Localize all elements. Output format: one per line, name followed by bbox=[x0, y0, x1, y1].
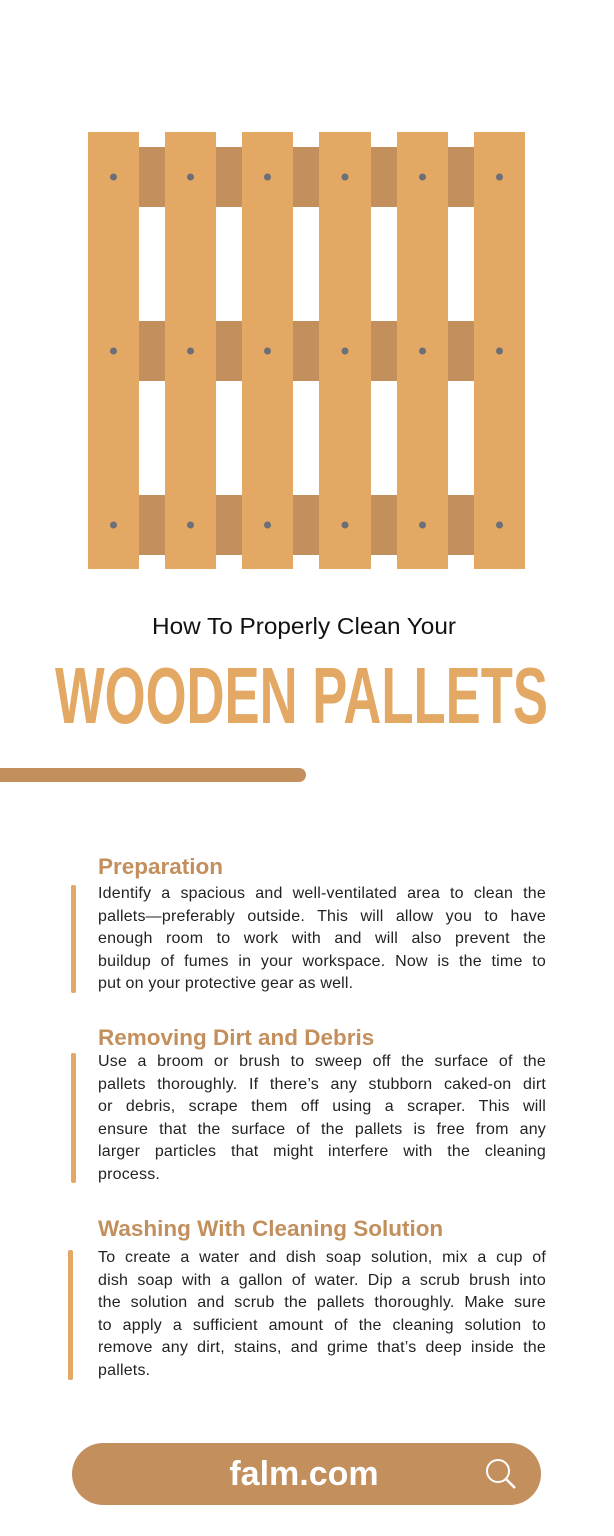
text: preparation: put on your protective gear as well. bbox=[98, 975, 353, 992]
text: removing dirt: ensure that the surface of the pallets is free from any bbox=[98, 1120, 546, 1138]
text: washing bbox=[98, 1249, 546, 1378]
heading: removing dirt: Removing Dirt and Debris bbox=[98, 1025, 374, 1050]
text: washing: remove any dirt, stains, and grime that’s deep inside the bbox=[98, 1339, 546, 1356]
text: removing dirt: Use a broom or brush to sweep off the surface of the bbox=[98, 1053, 546, 1070]
text: washing: To create a water and dish soap solution, mix a cup of bbox=[98, 1249, 546, 1266]
divider bar bbox=[0, 768, 306, 782]
text: washing: dish soap with a gallon of water. Dip a scrub brush into bbox=[98, 1272, 546, 1288]
heading: preparation: Preparation bbox=[98, 854, 223, 879]
text: preparation: pallets—preferably outside. This will allow you to have bbox=[98, 908, 546, 924]
text: preparation: Identify a spacious and well-ventilated area to clean the bbox=[98, 885, 546, 902]
section: preparation bbox=[71, 854, 546, 993]
section: washing bbox=[68, 1216, 546, 1380]
pallet illustration bbox=[88, 132, 525, 569]
footer pill bbox=[72, 1443, 541, 1505]
accent bar bbox=[68, 1250, 73, 1380]
text: washing: to apply a sufficient amount of the cleaning solution to bbox=[98, 1316, 546, 1334]
text: preparation: enough room to work with and will also prevent the bbox=[98, 930, 546, 947]
text: removing dirt: or debris, scrape them off using a scraper. This will bbox=[98, 1098, 546, 1115]
section: removing dirt bbox=[71, 1025, 546, 1183]
text: removing dirt: process. bbox=[98, 1166, 160, 1182]
text: washing: pallets. bbox=[98, 1362, 150, 1378]
text: removing dirt: pallets thoroughly. If there’s any stubborn caked-on dirt bbox=[98, 1076, 546, 1092]
accent bar bbox=[71, 1053, 76, 1183]
accent bar bbox=[71, 885, 76, 993]
text: preparation: buildup of fumes in your workspace. Now is the time to bbox=[98, 952, 546, 970]
footer text: falm.com bbox=[229, 1455, 379, 1493]
text: removing dirt: larger particles that might interfere with the cleaning bbox=[98, 1143, 546, 1160]
text: washing: the solution and scrub the pallets thoroughly. Make sure bbox=[98, 1294, 546, 1311]
title bbox=[55, 613, 548, 740]
title: How To Properly Clean Your bbox=[152, 613, 456, 639]
icon: search bbox=[486, 1459, 516, 1489]
text: preparation bbox=[98, 885, 546, 992]
heading: washing: Washing With Cleaning Solution bbox=[98, 1216, 443, 1241]
text: removing dirt bbox=[98, 1053, 546, 1182]
